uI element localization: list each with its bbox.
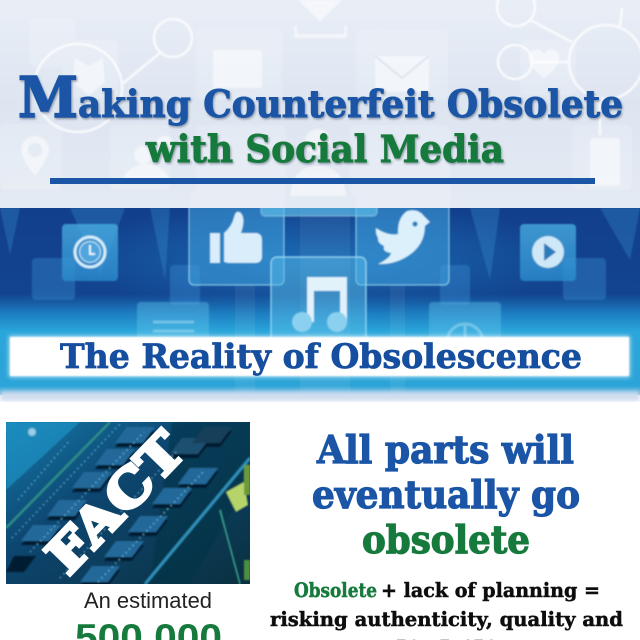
- panel: circuit board FACT photo: [6, 420, 250, 586]
- body text: obsolete plus lack of planning: + lack of planning =: [381, 578, 600, 602]
- panel: title header background with faded icons: [0, 0, 640, 208]
- white lower body: [0, 402, 640, 640]
- subtitle: with Social Media: with Social Media: [145, 127, 504, 171]
- FACT stamp text: FACT: [34, 420, 196, 585]
- chip shadows: [6, 431, 232, 586]
- icon tile: thumbs up: [189, 200, 284, 285]
- heading: All parts will eventually go obsolete: obsolete: [362, 517, 530, 562]
- title: Making Counterfeit Obsolete: aking Counterfeit Obsolete: [78, 82, 623, 126]
- fade at banner bottom: [0, 391, 640, 401]
- faded background tiles: [32, 258, 606, 305]
- divider line under title: [50, 178, 595, 184]
- panel: blue social media banner: [0, 200, 640, 398]
- icon tile: top sliver: [260, 208, 378, 218]
- title: Making Counterfeit Obsolete: M: [18, 65, 78, 131]
- title: Making Counterfeit Obsolete: [18, 65, 623, 131]
- icon tile: play button: [520, 224, 576, 281]
- body text: obsolete plus lack of planning: risking authenticity, quality and: [270, 607, 623, 631]
- icon tile: music note: [271, 257, 366, 347]
- chips: [21, 427, 232, 582]
- icon tile: twitter bird: [356, 200, 449, 285]
- panel: section heading bar: [9, 336, 630, 377]
- heading: All parts will eventually go obsolete: All parts will: [316, 427, 574, 472]
- body text: obsolete plus lack of planning: [270, 578, 623, 640]
- icon tile: clock: [62, 224, 118, 281]
- panel: obsolete statement: [270, 427, 623, 640]
- solder dots: [12, 424, 205, 582]
- heading: All parts will eventually go obsolete: eventually go: [312, 472, 580, 517]
- heading: All parts will eventually go obsolete: [312, 427, 580, 562]
- text: An estimated: An estimated: [84, 588, 212, 613]
- body text: obsolete plus lack of planning: Obsolete: [294, 578, 377, 602]
- heading: The Reality of Obsolescence: The Reality of Obsolescence: [60, 337, 582, 377]
